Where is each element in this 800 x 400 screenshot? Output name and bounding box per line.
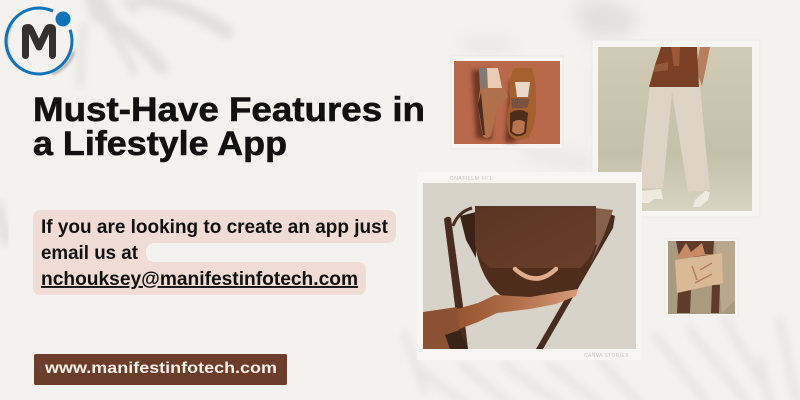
bag body	[476, 245, 597, 298]
jacket	[649, 47, 699, 87]
tote handles	[678, 243, 712, 259]
right shoe	[507, 68, 536, 140]
logo	[6, 8, 74, 74]
bag flap	[475, 206, 596, 268]
gold clasp	[515, 269, 556, 278]
left shoe	[479, 68, 508, 138]
strap right	[536, 214, 615, 349]
frame caption bottom: CANVA STORIES	[584, 353, 629, 359]
highlight background	[33, 210, 396, 295]
bag gussets	[590, 208, 613, 265]
website button: www.manifestinfotech.com	[44, 360, 277, 377]
logo letter M	[26, 28, 52, 56]
trousers	[640, 86, 710, 192]
title	[33, 91, 425, 163]
legs	[676, 241, 714, 257]
shoes	[642, 189, 663, 203]
logo shadow ring	[7, 24, 74, 74]
callout text: If you are looking to create an app just	[41, 217, 389, 238]
callout text	[41, 217, 389, 290]
sleeve	[423, 307, 468, 349]
photo: tote bag	[665, 239, 738, 316]
callout text: email us at	[41, 243, 139, 264]
contact callout	[33, 210, 396, 295]
title: a Lifestyle App	[33, 125, 287, 163]
tote	[675, 253, 723, 293]
photo: handbag	[417, 172, 642, 360]
photo: shoes	[451, 56, 563, 149]
arm and hand	[457, 289, 578, 330]
shoe shadows	[472, 70, 492, 140]
arm	[696, 47, 710, 86]
website button	[34, 354, 287, 385]
strap left	[444, 217, 468, 349]
photo: trousers	[592, 40, 760, 217]
title: Must-Have Features in	[33, 91, 425, 129]
frame caption top: CNAFILLM FF1	[450, 176, 492, 182]
callout text: nchouksey@manifestinfotech.com	[41, 269, 358, 290]
logo dot	[56, 12, 70, 26]
logo ring	[6, 8, 72, 74]
